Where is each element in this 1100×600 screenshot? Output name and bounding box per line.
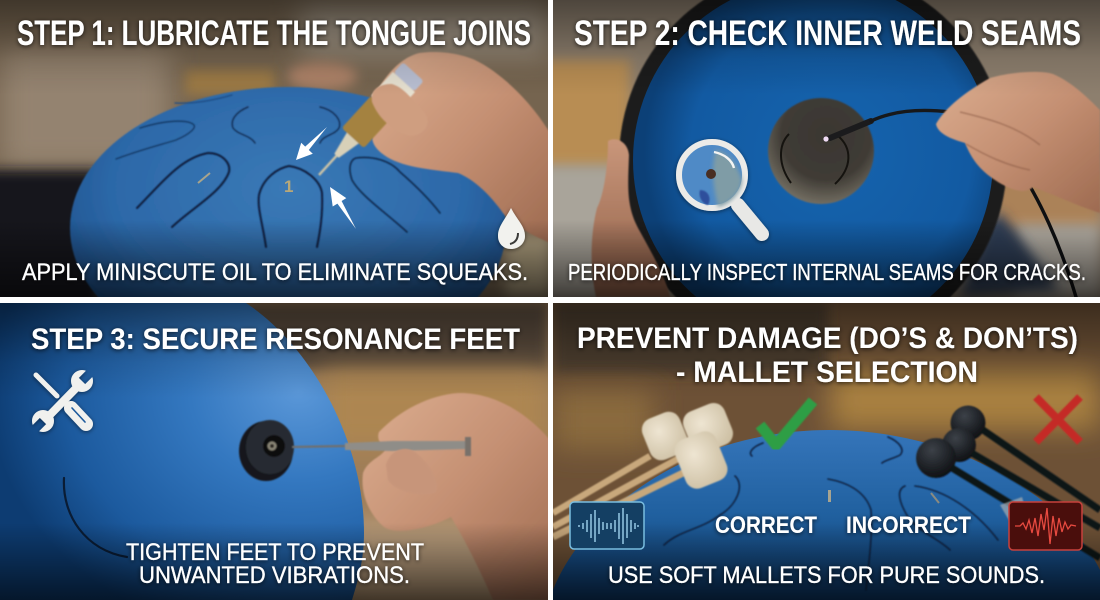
panel: prevent damage mallets <box>553 303 1100 600</box>
felt heads <box>638 399 737 492</box>
precision screwdriver <box>292 437 471 456</box>
panel: step 1 lubricate <box>0 0 548 297</box>
tongue slots <box>116 95 440 247</box>
icon: oil drop <box>498 208 525 249</box>
tongue markings <box>198 172 293 192</box>
borescope light <box>823 136 829 142</box>
check mark <box>760 401 813 445</box>
screwdriver <box>36 375 86 424</box>
drum rim <box>619 0 1006 297</box>
felt mallets: correct <box>553 399 737 537</box>
right hand <box>936 72 1100 213</box>
heading: step 3: STEP 3: SECURE RESONANCE FEET <box>31 323 520 356</box>
panel: step 3 resonance feet <box>0 303 550 600</box>
caption: step 3 <box>126 539 424 589</box>
panel: step 2 inspect <box>553 0 1100 297</box>
drum body <box>553 430 1100 600</box>
black sticks <box>952 430 1100 558</box>
wrench <box>30 368 96 435</box>
sound hole <box>768 98 874 204</box>
hard mallets: incorrect <box>916 406 1100 558</box>
photo background: blurred room <box>0 0 550 310</box>
heading: prevent damage: - MALLET SELECTION <box>676 356 978 389</box>
photo vignette <box>553 0 1100 297</box>
tongue drum body <box>69 86 506 297</box>
photo vignette <box>0 0 548 297</box>
hand <box>362 393 550 600</box>
photo vignette <box>0 303 548 600</box>
caption: step 3: TIGHTEN FEET TO PREVENT <box>126 539 424 566</box>
photo background: blurred room <box>553 303 1100 600</box>
drum body <box>0 303 364 600</box>
photo background: blurred room <box>246 303 548 600</box>
photo vignette <box>553 303 1100 600</box>
icon: pure sound wave <box>570 502 644 549</box>
wooden sticks <box>553 455 685 537</box>
label: correct: CORRECT <box>715 512 817 539</box>
label: incorrect: INCORRECT <box>846 512 971 539</box>
caption: step 3: UNWANTED VIBRATIONS. <box>139 562 410 589</box>
hand holding bottle <box>372 52 550 243</box>
tongue markings: 1 <box>284 177 293 196</box>
rubber foot <box>239 420 294 481</box>
thumb <box>371 83 411 124</box>
left hand <box>592 139 670 297</box>
thumb <box>387 448 413 475</box>
drum blue face <box>633 0 992 297</box>
heading: prevent damage <box>577 322 1078 389</box>
cross mark <box>1036 397 1080 442</box>
borescope cable <box>830 110 1076 297</box>
heading: prevent damage: PREVENT DAMAGE (DO’S & DON’TS) <box>577 322 1078 355</box>
caption: step 1: APPLY MINISCUTE OIL TO ELIMINATE SQUEAKS. <box>22 259 528 286</box>
finger creases <box>960 112 1040 170</box>
caption: mallets: USE SOFT MALLETS FOR PURE SOUNDS. <box>608 562 1045 589</box>
heading: step 1: STEP 1: LUBRICATE THE TONGUE JOINS <box>17 14 531 53</box>
rubber balls <box>950 406 986 440</box>
tongue slots <box>664 437 998 590</box>
arrows pointing to joint <box>296 127 356 229</box>
inner slot lines <box>781 134 848 184</box>
photo background: blurred room <box>540 0 1100 297</box>
tongue markers <box>828 490 939 503</box>
icon: harsh sound wave <box>1009 502 1082 550</box>
tongue slot arc <box>64 478 127 557</box>
oil bottle <box>318 62 424 176</box>
icon: crossed tools <box>30 368 96 435</box>
icon: magnifying glass <box>679 142 762 234</box>
glare wedge <box>1000 497 1026 522</box>
